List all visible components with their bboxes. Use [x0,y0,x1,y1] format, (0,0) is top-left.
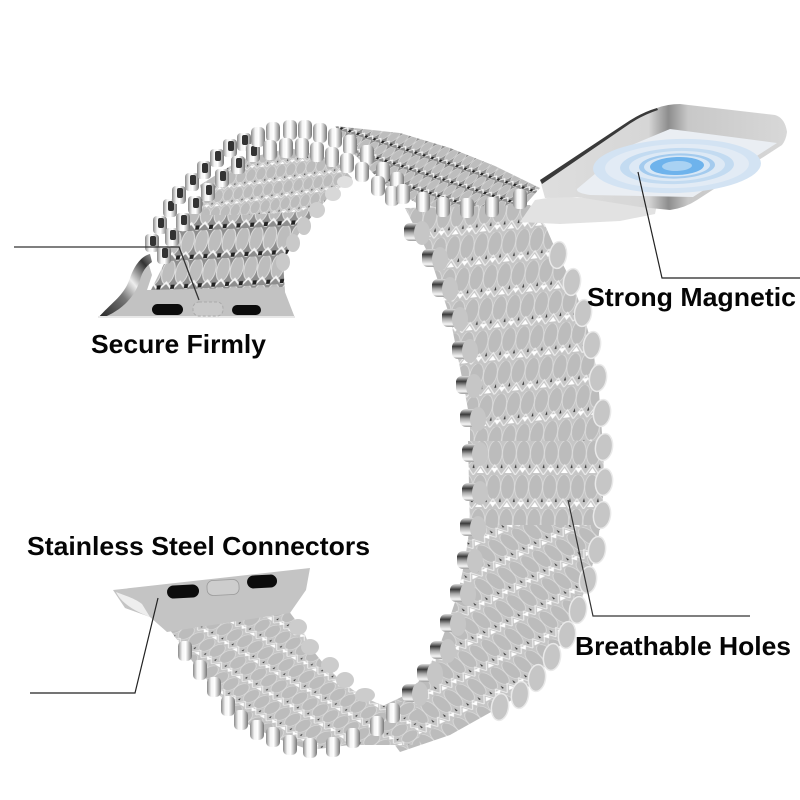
lower connector slot: left [167,584,199,599]
leader line: breathable holes [568,500,750,616]
connector: lower lug [113,568,310,632]
band: lower left mesh segment [170,610,420,750]
band: left edge links of right mesh [402,221,488,706]
heading: stainless steel connectors: Stainless Steel Connectors [27,531,370,561]
connector release button [193,302,223,316]
band: top mesh segment [335,126,540,212]
heading: breathable holes: Breathable Holes [575,631,791,661]
band: right mesh, upper part [405,205,604,530]
band: right mesh, lower part [370,525,600,752]
band: right edge links of right mesh [490,240,614,722]
leader line: stainless steel connectors [30,598,158,693]
band: upper left mesh segment [150,148,353,292]
leader line: secure firmly [14,247,199,300]
clasp inner surface [577,129,777,197]
lower connector slot: right [247,574,277,589]
lower connector release button [207,579,239,596]
connector slot: right [232,305,261,315]
watch back: magnetic clasp [520,104,787,224]
leader line: strong magnetic [638,172,800,278]
band: left edge links, upper [145,120,527,264]
clasp dark edge highlight [540,108,658,184]
connector slot: left [152,304,183,315]
connector: upper lug [98,254,295,318]
magnetic rings [592,136,762,196]
band: bottom edge links [178,619,400,758]
heading: secure firmly: Secure Firmly [91,329,267,359]
heading: strong magnetic: Strong Magnetic [587,282,796,312]
clasp chrome frame [540,104,787,210]
mesh under clasp [520,196,657,224]
